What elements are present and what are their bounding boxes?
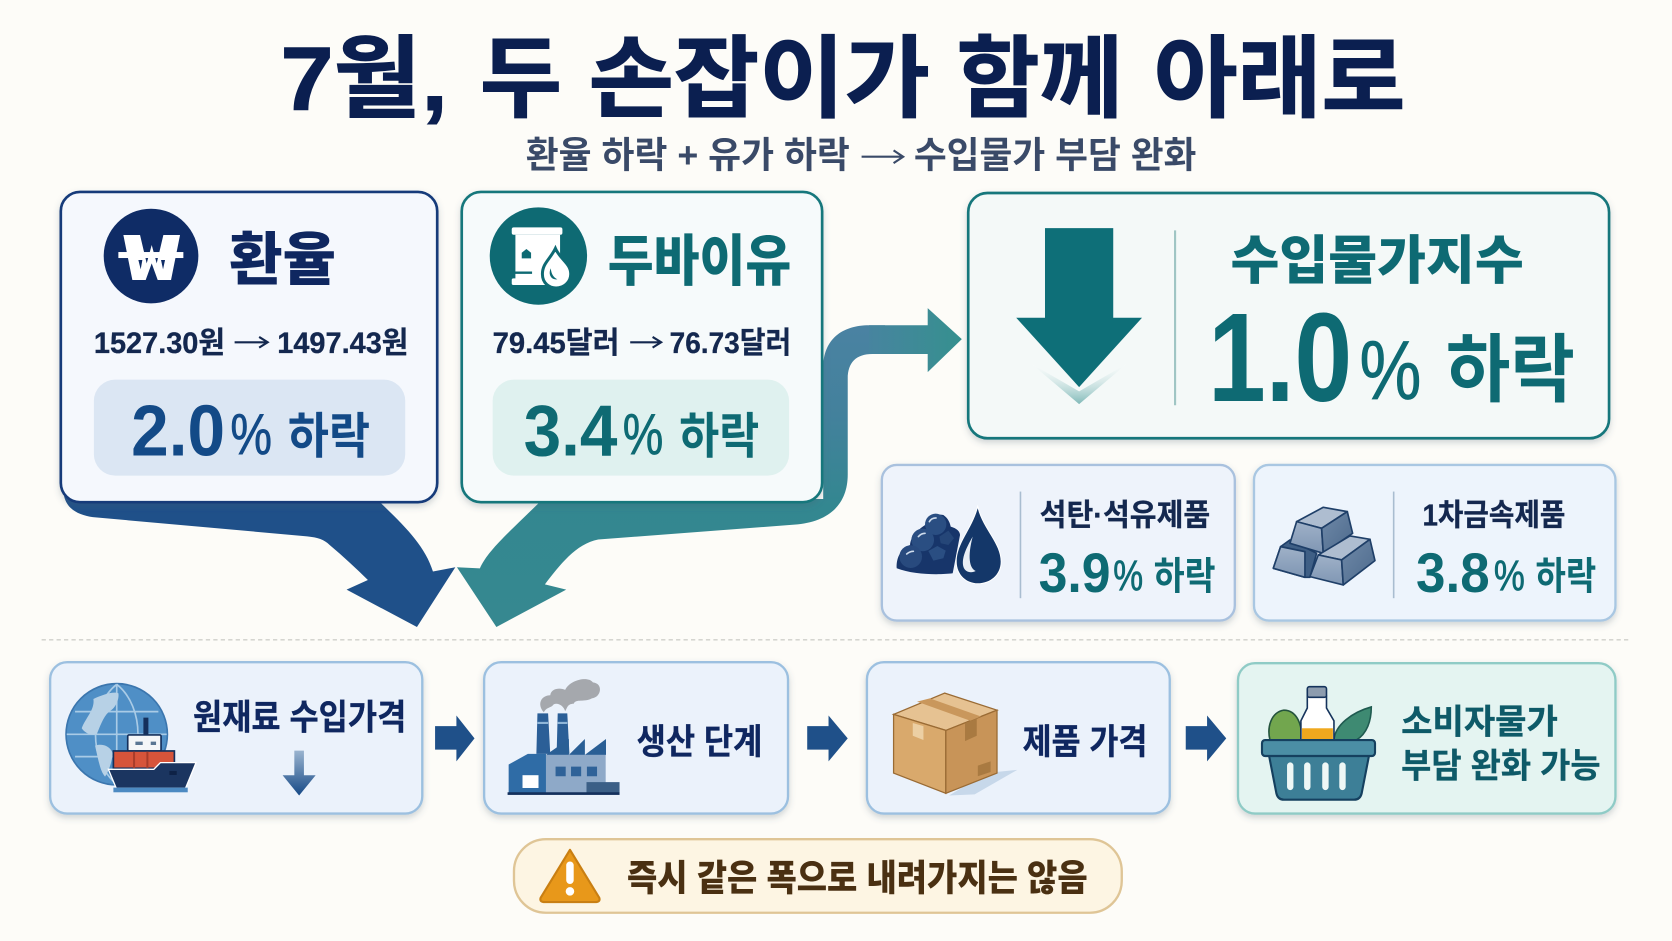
callout: Dubai oil change: 하락	[679, 410, 759, 464]
icon: coal and oil drop	[897, 508, 1001, 583]
icon: won coin	[104, 209, 198, 303]
heading: primary metal products: 1차금속제품	[1422, 498, 1565, 533]
title: 두	[480, 29, 562, 129]
figure: primary metal change	[1416, 542, 1596, 604]
figure: primary metal change: 3.8	[1416, 542, 1490, 604]
figure: coal and petroleum change: %	[1113, 553, 1143, 601]
text: Dubai oil values: 79.45달러	[493, 327, 620, 360]
figure: coal and petroleum change	[1039, 542, 1216, 604]
panel: consumer price relief	[1238, 663, 1615, 814]
callout: warning	[514, 839, 1122, 913]
panel: product price	[867, 662, 1170, 814]
callout: exchange rate change: 하락	[288, 410, 370, 464]
subtitle: 수입물가 부담 완화	[914, 134, 1196, 175]
heading: Dubai oil: 두바이유	[608, 230, 791, 292]
text: exchange rate values	[94, 327, 408, 360]
heading: exchange rate: 환율	[229, 228, 336, 292]
subtitle: 환율 하락 + 유가 하락	[526, 134, 850, 175]
panel: exchange rate	[61, 192, 437, 502]
text: exchange rate values: 1497.43원	[277, 327, 408, 360]
panel: production stage	[484, 662, 788, 814]
figure: primary metal change: 하락	[1535, 556, 1596, 599]
icon: metal ingots	[1273, 507, 1375, 585]
label: raw material import price: 원재료 수입가격	[193, 698, 406, 737]
subtitle	[526, 134, 1196, 175]
icon: warning triangle	[540, 850, 600, 902]
panel: raw material import price	[50, 662, 422, 814]
arrow: Dubai oil branches to centre and import price index	[457, 308, 962, 627]
callout: exchange rate change: 2.0	[131, 390, 225, 471]
text: Dubai oil values	[493, 327, 791, 360]
figure: import price index change: %	[1360, 324, 1421, 417]
callout: exchange rate change: %	[230, 403, 272, 467]
title: 함께	[956, 29, 1123, 129]
panel: coal and petroleum products	[882, 465, 1235, 621]
panel: import price index	[968, 193, 1609, 438]
text: Dubai oil values: 76.73달러	[670, 327, 791, 360]
icon: globe and cargo ship	[66, 684, 195, 792]
icon: small down arrow	[283, 751, 316, 795]
heading: coal and petroleum products: 석탄·석유제품	[1040, 498, 1210, 533]
label: consumer price: 소비자물가	[1401, 704, 1558, 742]
icon: shopping basket	[1262, 687, 1375, 800]
label: burden relief possible: 부담 완화 가능	[1401, 747, 1601, 785]
panel: Dubai oil	[462, 192, 822, 502]
heading: import price index: 수입물가지수	[1231, 232, 1524, 290]
figure: import price index change	[1208, 287, 1575, 428]
figure: coal and petroleum change: 3.9	[1039, 542, 1111, 604]
callout: Dubai oil change: %	[623, 403, 663, 467]
arrow: step three to four	[1186, 715, 1226, 761]
text: warning message: 즉시 같은 폭으로 내려가지는 않음	[627, 857, 1088, 898]
icon: factory with smoke	[508, 679, 620, 795]
icon: oil barrel and drop	[490, 207, 587, 305]
figure: import price index change: 1.0	[1208, 287, 1352, 428]
figure: import price index change: 하락	[1446, 328, 1575, 412]
callout: Dubai oil change	[493, 380, 789, 476]
arrow: step one to two	[435, 715, 475, 761]
arrow: exchange rate to centre	[64, 496, 455, 627]
callout: exchange rate change	[94, 380, 405, 476]
callout: Dubai oil change: 3.4	[524, 390, 617, 471]
title: 손잡이가	[589, 29, 930, 129]
title: 7월,	[280, 29, 448, 129]
title	[280, 29, 1405, 129]
text: exchange rate values: 1527.30원	[94, 327, 225, 360]
label: production stage: 생산 단계	[637, 723, 762, 762]
title: 아래로	[1154, 29, 1405, 129]
icon: large down arrow	[1016, 228, 1142, 404]
figure: coal and petroleum change: 하락	[1154, 556, 1216, 599]
arrow: step two to three	[807, 715, 848, 761]
figure: primary metal change: %	[1494, 553, 1525, 601]
label: product price: 제품 가격	[1023, 723, 1147, 762]
icon: cardboard box	[894, 693, 1017, 795]
panel: primary metal products	[1254, 465, 1615, 621]
